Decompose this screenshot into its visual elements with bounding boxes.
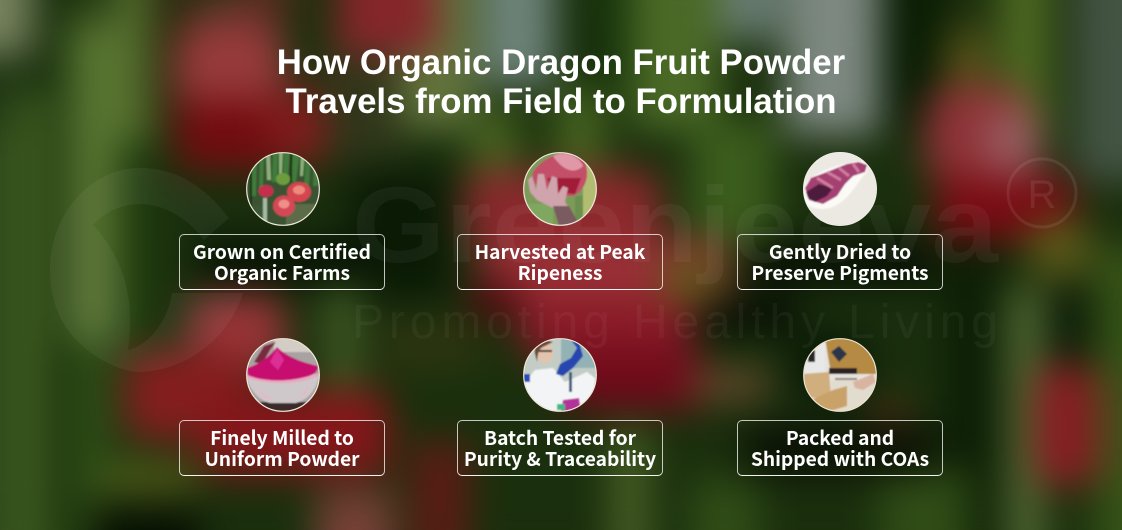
step 6: photo of hands taping cardboard boxes <box>803 338 877 412</box>
step 5 label: Purity & Traceability <box>464 444 656 472</box>
step 1 label: Organic Farms <box>214 258 350 286</box>
step 2 label: Harvested at Peak <box>475 237 645 265</box>
step 6 label: Shipped with COAs <box>751 444 929 472</box>
step 2 label: Ripeness <box>518 258 602 286</box>
step 6 label: Packed and <box>786 423 894 451</box>
title: How Organic Dragon Fruit Powder <box>277 43 845 82</box>
step 4: photo of pink powder in a bowl <box>246 338 320 412</box>
step 3 label: Gently Dried to <box>769 237 911 265</box>
step 3: photo of dried slices on a white spoon <box>803 152 877 226</box>
step 6 label <box>737 420 943 476</box>
watermark registered mark: R <box>1028 173 1056 217</box>
step 1 label <box>179 234 385 290</box>
step 5: photo of lab technician testing samples <box>523 338 597 412</box>
step 2 label <box>457 234 663 290</box>
watermark logo <box>50 168 243 372</box>
step 3 label: Preserve Pigments <box>751 258 929 286</box>
step 1 label: Grown on Certified <box>193 237 371 265</box>
step 1: photo of dragon fruit on the plant <box>246 152 320 226</box>
watermark wordmark: Greenjeeva <box>352 164 999 285</box>
step 4 label <box>179 420 385 476</box>
step 5 label: Batch Tested for <box>484 423 636 451</box>
title: Travels from Field to Formulation <box>285 82 837 120</box>
step 4 label: Finely Milled to <box>210 423 354 451</box>
watermark tagline: Promoting Healthy Living <box>352 296 998 349</box>
step 2: photo of hand holding dragon fruit <box>523 152 597 226</box>
title <box>277 43 845 120</box>
step 4 label: Uniform Powder <box>204 444 360 472</box>
watermark registered mark <box>1008 159 1076 227</box>
step 3 label <box>737 234 943 290</box>
step 5 label <box>457 420 663 476</box>
